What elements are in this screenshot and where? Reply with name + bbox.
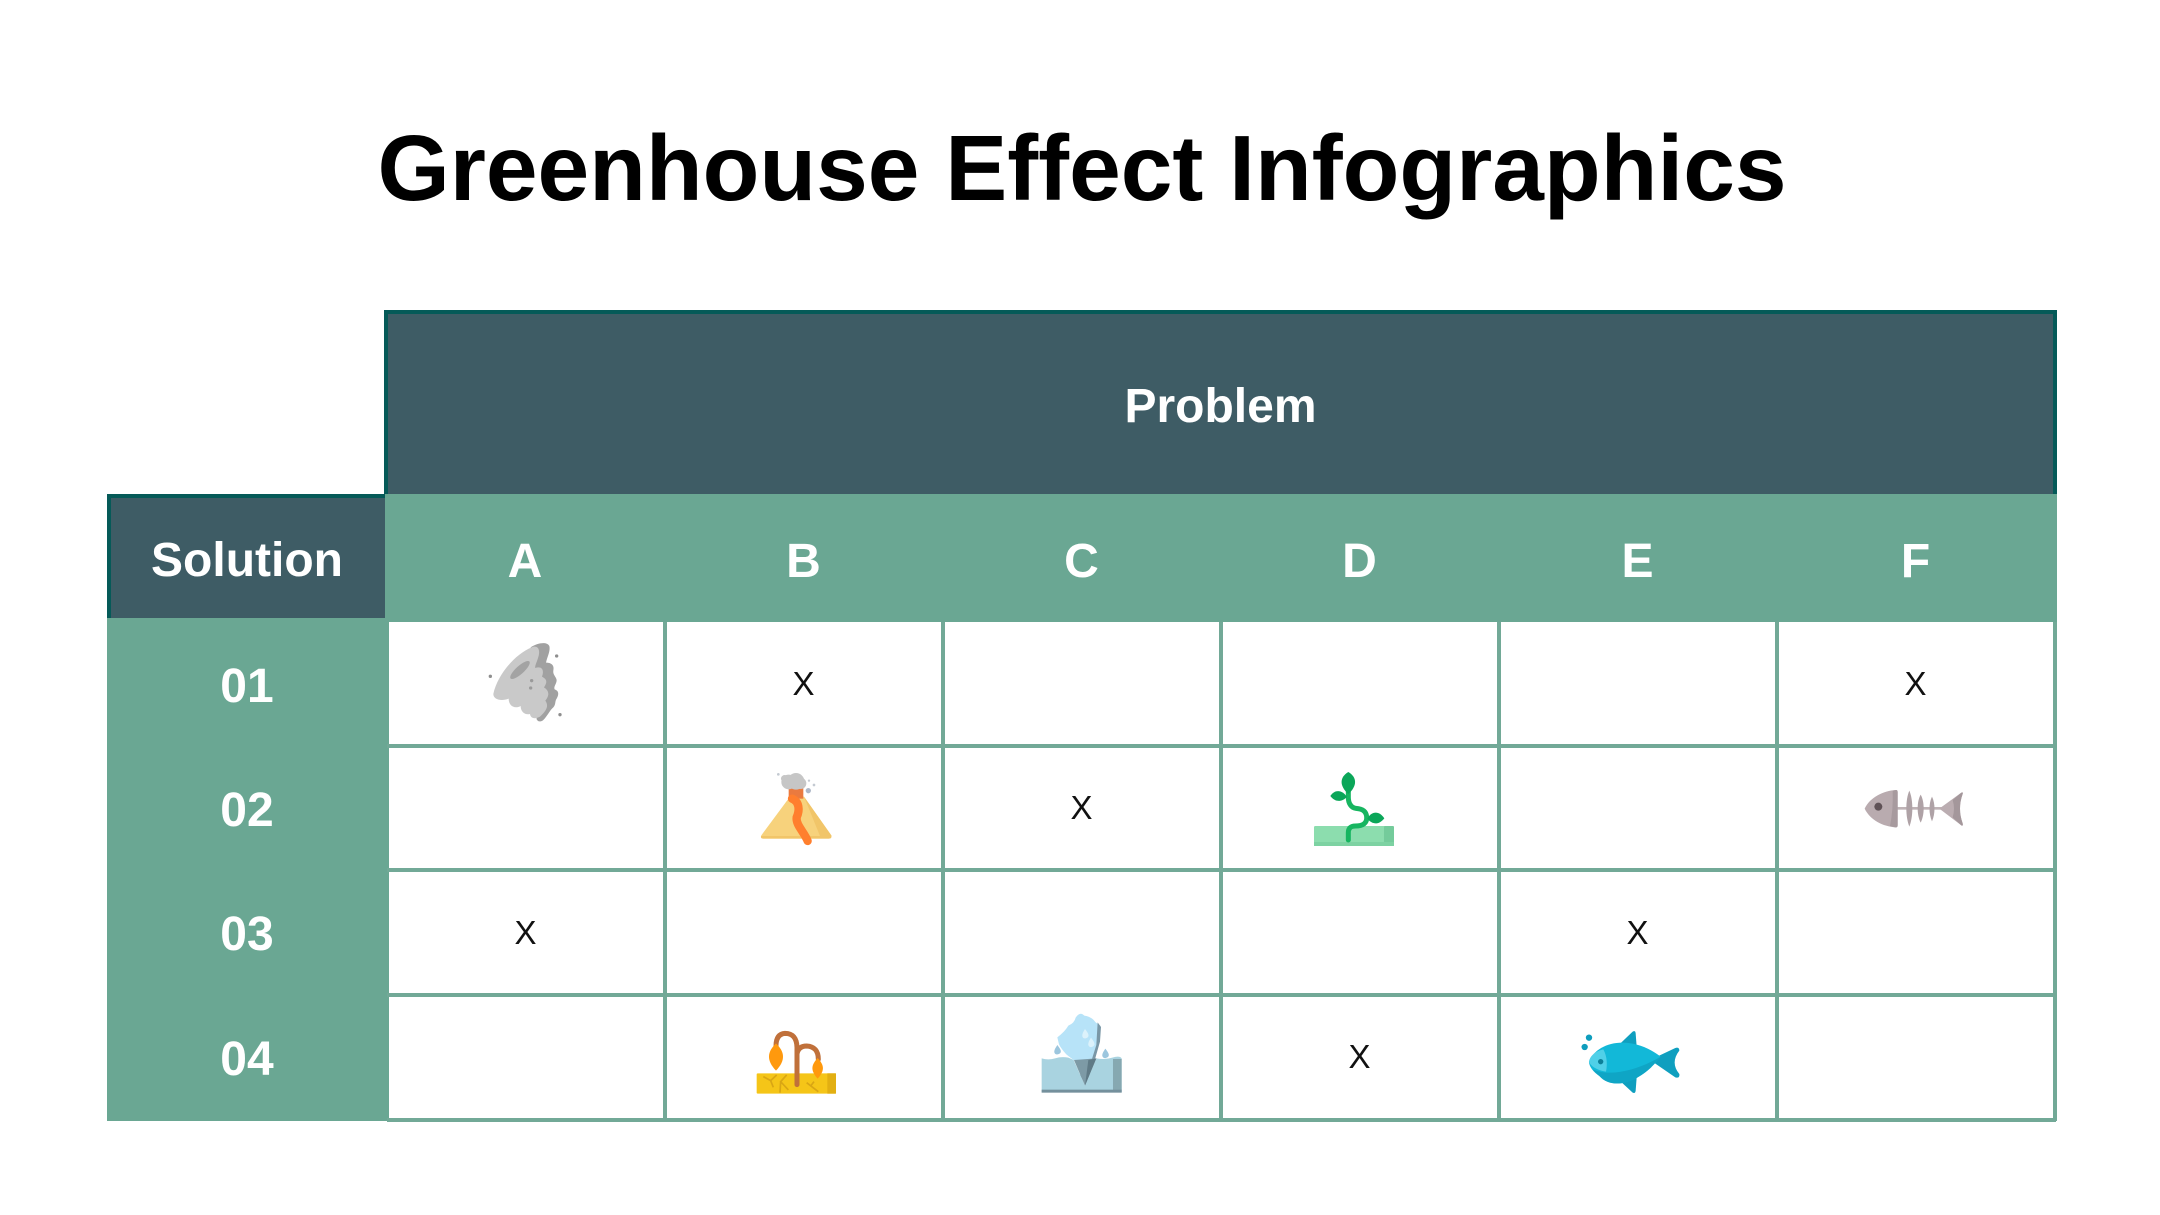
column E: E — [1621, 535, 1654, 588]
row 04: 04 — [220, 1032, 274, 1086]
icon: fish — [1581, 1031, 1679, 1093]
icon: volcano — [761, 773, 831, 841]
icon: sprout — [1314, 772, 1394, 846]
panel: problem header: Problem — [1124, 380, 1317, 433]
icon: melting iceberg — [1042, 1014, 1122, 1093]
icon: fish skeleton — [1865, 790, 1963, 827]
mark: row 01 column B: X — [792, 665, 814, 702]
column D: D — [1342, 535, 1377, 588]
column B: B — [786, 535, 821, 588]
panel: column letters band — [385, 494, 2057, 622]
column A: A — [508, 535, 542, 588]
icon: tornado — [489, 643, 562, 721]
row 03: 03 — [220, 908, 274, 960]
panel: solution header — [107, 494, 385, 618]
panel: solution number column — [107, 618, 389, 1121]
title: Greenhouse Effect Infographics — [377, 116, 1787, 220]
row 01: 01 — [220, 660, 274, 712]
icon: wilted plant — [757, 1033, 836, 1094]
mark: row 04 column D: X — [1348, 1038, 1370, 1075]
column C: C — [1064, 535, 1099, 588]
panel: problem header — [384, 310, 2057, 494]
row 02: 02 — [220, 784, 274, 836]
mark: row 01 column F: X — [1904, 665, 1926, 702]
mark: row 02 column C: X — [1070, 789, 1092, 826]
mark: row 03 column E: X — [1626, 914, 1648, 951]
panel: solution header: Solution — [151, 534, 343, 587]
mark: row 03 column A: X — [514, 914, 536, 951]
column F: F — [1901, 535, 1930, 588]
